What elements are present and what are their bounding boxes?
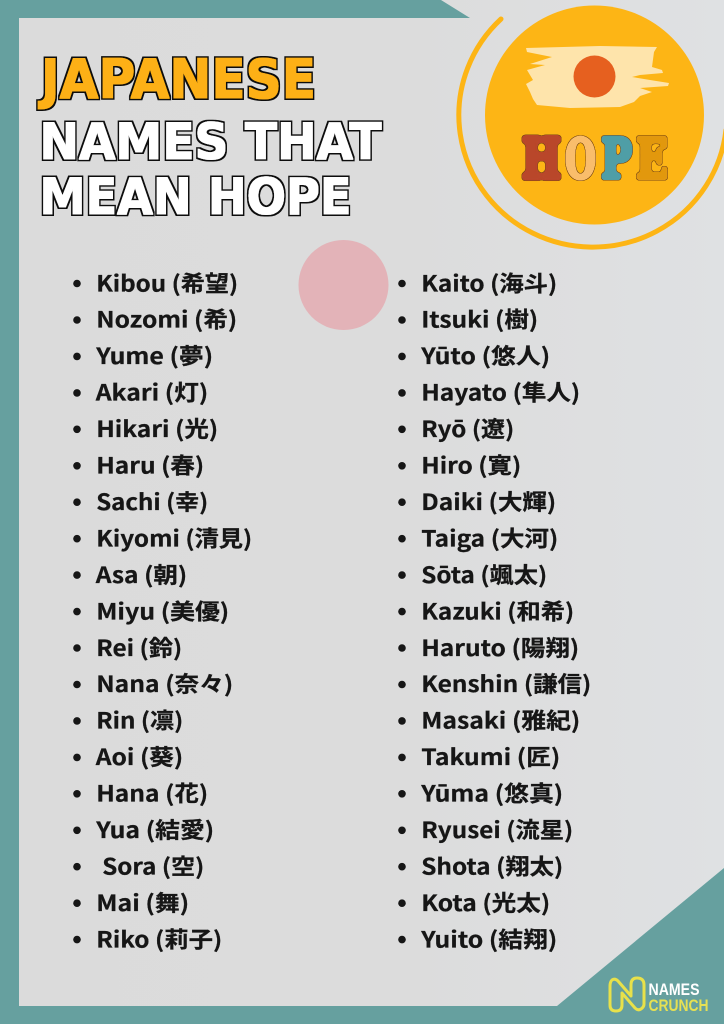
- name: Rei: Rei (鈴): [96, 631, 182, 663]
- logo: Names Crunch: [610, 978, 708, 1015]
- name: Yūto: Yūto (悠人): [420, 339, 550, 371]
- name: Kaito: Kaito (海斗): [421, 266, 557, 298]
- name: Sōta: Sōta (颯太): [421, 558, 547, 590]
- name: Nana: Nana (奈々): [96, 667, 233, 699]
- name: Kenshin: Kenshin (謙信): [421, 667, 591, 699]
- name: Daiki: Daiki (大輝): [421, 485, 556, 517]
- name: Asa: Asa (朝): [95, 558, 187, 590]
- name: Hikari: Hikari (光): [96, 412, 218, 444]
- right name list: [398, 266, 591, 954]
- name: Yua: Yua (結愛): [95, 813, 214, 845]
- name: Hiro: Hiro (寛): [421, 449, 521, 481]
- logo word CRUNCH: CRUNCH: [648, 996, 708, 1015]
- name: Ryusei: Ryusei (流星): [421, 813, 573, 845]
- pink decorative circle: [298, 240, 388, 330]
- name: Shota: Shota (翔太): [421, 850, 563, 882]
- name: Kiyomi: Kiyomi (清見): [96, 521, 252, 553]
- logo word NAMES: NAMES: [648, 980, 700, 999]
- name: Nozomi: Nozomi (希): [96, 303, 237, 335]
- letter H: H: [522, 126, 561, 191]
- name: Riko: Riko (莉子): [96, 922, 222, 954]
- name: Miyu: Miyu (美優): [96, 594, 229, 626]
- name: Kibou: Kibou (希望): [96, 266, 238, 298]
- name: Yuito: Yuito (結翔): [420, 922, 557, 954]
- name: Itsuki: Itsuki (樹): [421, 303, 538, 335]
- name: Aoi: Aoi (葵): [95, 740, 183, 772]
- name: Rin: Rin (凛): [96, 704, 183, 736]
- icon: hope badge: [459, 6, 724, 247]
- name: Akari: Akari (灯): [95, 376, 208, 408]
- name: Yume: Yume (夢): [95, 339, 213, 371]
- letter P: P: [601, 126, 632, 191]
- name: Hana: Hana (花): [96, 777, 208, 809]
- name: Hayato: Hayato (隼人): [421, 376, 580, 408]
- title line: NAMES THAT: NAMES THAT: [40, 113, 382, 171]
- name: Kazuki: Kazuki (和希): [421, 594, 574, 626]
- title line: MEAN HOPE: MEAN HOPE: [40, 168, 352, 226]
- name: Taiga: Taiga (大河): [421, 521, 558, 553]
- HOPE lettering: [522, 126, 668, 191]
- name: Yūma: Yūma (悠真): [420, 777, 563, 809]
- name: Kota: Kota (光太): [421, 886, 550, 918]
- name: Masaki: Masaki (雅紀): [421, 704, 580, 736]
- letter O: O: [565, 126, 596, 191]
- name: Ryō: Ryō (遼): [421, 412, 514, 444]
- brush stroke flag: [526, 46, 669, 108]
- icon: N logo mark: [610, 978, 644, 1011]
- name: Takumi: Takumi (匠): [421, 740, 560, 772]
- orange ring arc: [459, 19, 724, 247]
- name: Mai: Mai (舞): [96, 886, 189, 918]
- title line: JAPANESE: JAPANESE: [37, 48, 316, 111]
- left name list: [73, 266, 252, 954]
- name: Sora: Sora (空): [102, 850, 204, 882]
- red sun: [574, 56, 616, 98]
- name: Haru: Haru (春): [96, 449, 204, 481]
- title: [37, 48, 382, 226]
- letter E: E: [636, 126, 668, 191]
- name: Sachi: Sachi (幸): [96, 485, 208, 517]
- name: Haruto: Haruto (陽翔): [421, 631, 579, 663]
- orange disc: [485, 6, 704, 224]
